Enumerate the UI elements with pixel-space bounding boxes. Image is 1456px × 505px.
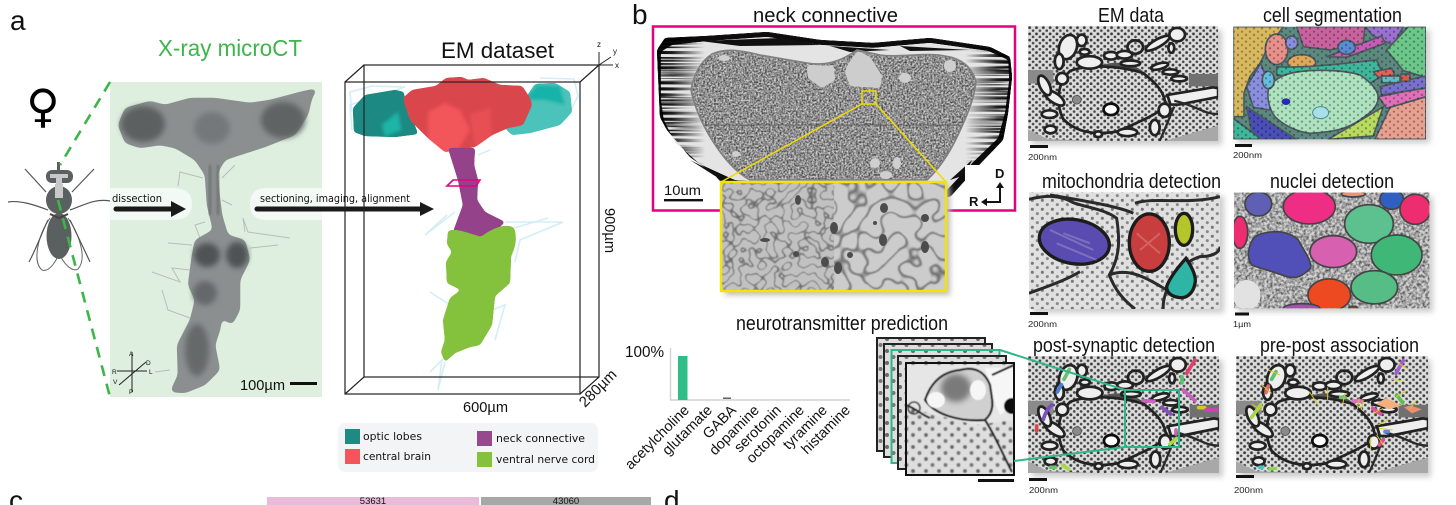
panel: cell segmentation (1233, 5, 1430, 160)
EM image (1028, 26, 1218, 141)
bar chart: histamine (799, 403, 854, 458)
scale bar: 200nm (1028, 312, 1057, 329)
bar chart: serotonin (731, 403, 785, 456)
bar chart: GABA (700, 402, 740, 442)
scale bar: 200nm: 200nm (1028, 152, 1057, 162)
scale bar: 200nm: 200nm (1234, 485, 1263, 495)
panel c: stacked bar (9, 485, 651, 505)
scale bar: 10um: 10um (664, 182, 701, 198)
icon: orientation axes: V (113, 379, 118, 386)
bar chart: tyramine (780, 403, 831, 453)
icon: xyz axes: x (615, 61, 619, 70)
scale bar: 10um (662, 178, 706, 204)
dashed zoom lines (58, 82, 110, 397)
heading: EM data: EM data (1098, 5, 1165, 27)
icon: orientation axes: A (129, 351, 134, 358)
synapse associations (1252, 361, 1422, 469)
EM image (1028, 356, 1219, 473)
bar chart: glutamate (659, 403, 716, 459)
cross section image (655, 30, 1015, 200)
dimension labels (463, 208, 620, 416)
icon: orientation axes (112, 351, 153, 396)
icon: xyz axes: y (613, 47, 617, 56)
scale bar: 200nm: 200nm (1028, 319, 1057, 329)
nuclei image (1232, 189, 1431, 313)
icon: fly (8, 162, 110, 270)
scale bar: 200nm (1233, 144, 1262, 160)
icon: xyz axes (597, 40, 619, 70)
symbol: female: ♀ (26, 79, 60, 133)
panel: post-synaptic detection (1000, 335, 1223, 495)
orientation: D R: D (995, 166, 1004, 181)
scale bar: 100µm (240, 377, 317, 394)
marker: section plane (447, 180, 480, 186)
heading: cell segmentation: cell segmentation (1263, 5, 1402, 27)
panel: EM data (1028, 5, 1222, 162)
panel: nuclei detection (1232, 171, 1433, 329)
panel b: neck connective (653, 5, 1015, 295)
scale bar: 200nm (1234, 475, 1263, 495)
heading: post-synaptic detection: post-synaptic detection (1033, 335, 1215, 357)
wisps: tissue outline (350, 78, 578, 390)
region: central brain (403, 77, 532, 152)
scale bar: 100µm: 100µm (240, 377, 285, 394)
panel: mitochondria detection (1028, 171, 1224, 329)
orientation: D R (965, 165, 1010, 209)
pill: dissection arrow (110, 188, 192, 220)
synapse marks (1037, 360, 1217, 469)
legend: optic lobes (363, 430, 422, 443)
dimension labels: 600µm (463, 399, 508, 416)
panel a: X-ray microCT (8, 35, 434, 397)
dimension labels: 900µm (601, 208, 618, 253)
heading: nuclei detection: nuclei detection (1270, 171, 1394, 193)
pill: sectioning arrow (250, 188, 434, 220)
region: neck connective (448, 148, 505, 237)
bar chart: acetylcholine (622, 403, 693, 473)
heading: pre-post association: pre-post association (1260, 335, 1419, 357)
icon: xyz axes: z (597, 40, 601, 49)
bar chart: 100% (625, 344, 664, 361)
heading: EM dataset: EM dataset (441, 38, 554, 63)
scale bar: 200nm: 200nm (1029, 485, 1058, 495)
scale bar: 200nm: 200nm (1233, 150, 1262, 160)
legend: ventral nerve cord (496, 453, 595, 466)
bar chart (622, 344, 854, 473)
pill: sectioning arrow: sectioning, imaging, alignment (260, 192, 411, 205)
panel: neurotransmitter prediction (622, 313, 1020, 482)
inset: zoomed EM (721, 182, 950, 295)
icon: orientation axes: R (112, 369, 117, 376)
scale bar: 1µm (1233, 312, 1251, 329)
legend: central brain (363, 450, 431, 463)
legend (338, 423, 598, 472)
scale bar: 200nm (1029, 478, 1058, 495)
panel a: EM dataset (338, 38, 620, 472)
scale bar: 1µm: 1µm (1233, 319, 1251, 329)
region: optic lobe left (353, 90, 418, 137)
bounding box (345, 65, 599, 394)
bar chart: octopamine (744, 403, 808, 467)
icon: orientation axes: L (149, 369, 153, 376)
panel label a: a (10, 5, 26, 36)
mitochondria image (1029, 192, 1220, 309)
heading: neurotransmitter prediction: neurotransmitter prediction (736, 313, 948, 335)
green background panel (110, 82, 322, 397)
dimension labels: 280µm (576, 366, 620, 411)
EM image (1236, 356, 1428, 473)
segmentation image (1233, 27, 1426, 139)
icon: orientation axes: D (146, 360, 151, 367)
specimen: X-ray nervous system (118, 88, 318, 393)
legend: neck connective (496, 432, 585, 445)
image stack (877, 338, 1020, 482)
pink frame (653, 26, 1015, 210)
heading: mitochondria detection: mitochondria detection (1042, 171, 1221, 193)
panel: pre-post association (1234, 335, 1431, 495)
bar segment: 43060 (481, 496, 651, 505)
region: optic lobe right (505, 83, 572, 135)
pill: dissection arrow: dissection (112, 192, 162, 205)
heading: X-ray microCT: X-ray microCT (158, 35, 302, 61)
icon: orientation axes: P (129, 389, 133, 396)
bar chart: dopamine (706, 403, 763, 459)
region: ventral nerve cord (441, 226, 516, 362)
orientation: D R: R (969, 194, 979, 209)
heading: neck connective: neck connective (753, 5, 898, 27)
bar segment: 53631 (267, 496, 479, 505)
callout: zoom region (1000, 350, 1179, 461)
scale bar: 200nm (1028, 145, 1057, 162)
